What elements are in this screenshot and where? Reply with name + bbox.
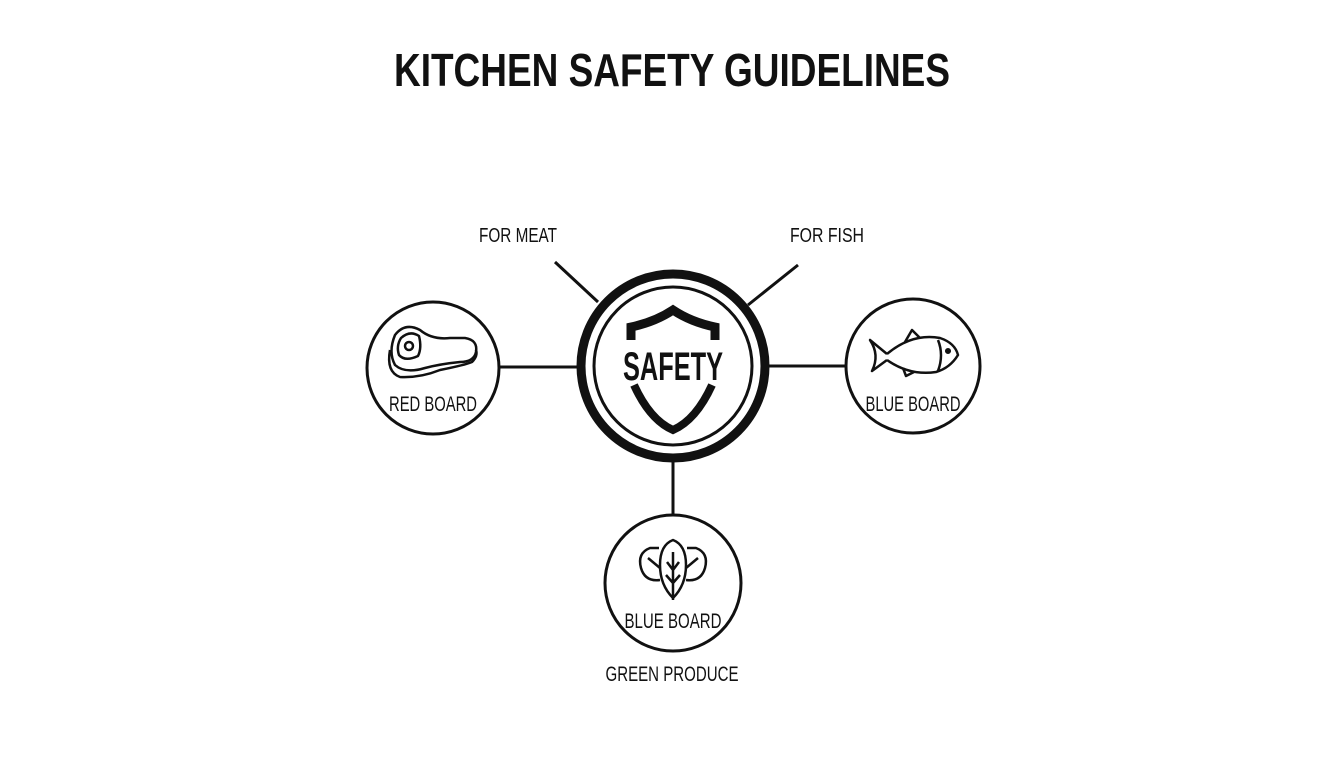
node: blue board (fish) bbox=[846, 299, 980, 433]
label: for fish: FOR FISH bbox=[790, 225, 864, 247]
label: for meat: FOR MEAT bbox=[479, 225, 557, 247]
center hub: safety: SAFETY bbox=[623, 345, 723, 389]
connector lines bbox=[499, 262, 847, 516]
center hub: safety bbox=[581, 274, 765, 458]
icon: steak bbox=[389, 327, 476, 377]
node: blue board (fish): BLUE BOARD bbox=[866, 393, 960, 416]
icon: shield bbox=[631, 310, 715, 380]
icon: fish bbox=[870, 330, 958, 376]
node: red board (meat) bbox=[367, 302, 499, 434]
node: blue board (produce) bbox=[605, 515, 741, 651]
label: green produce: GREEN PRODUCE bbox=[606, 663, 738, 686]
title: KITCHEN SAFETY GUIDELINES bbox=[394, 44, 950, 96]
icon: leafy greens bbox=[640, 540, 706, 600]
node: blue board (produce): BLUE BOARD bbox=[624, 610, 722, 633]
node: red board (meat): RED BOARD bbox=[389, 393, 477, 416]
